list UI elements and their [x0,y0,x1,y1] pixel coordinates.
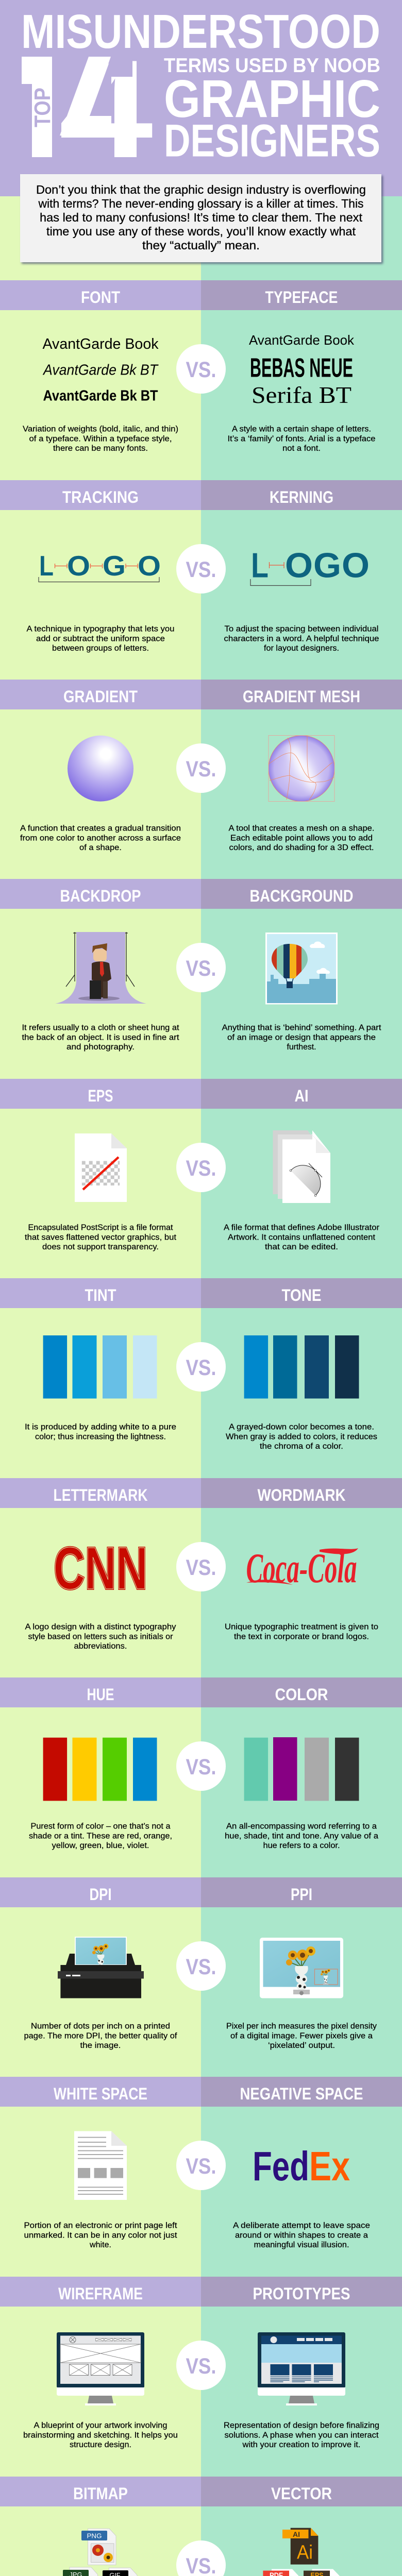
title block [22,14,379,157]
heading band: TRACKING [62,488,139,506]
descriptions: the text in corporate or brand logos. [234,1632,369,1641]
icon: prototype monitor [258,2332,345,2405]
intro text: Don’t you think that the graphic design industry is overflowing [36,183,366,196]
subtitle: terms used by noob: TERMS USED BY NOOB [164,55,380,77]
heading band: BITMAP [73,2484,128,2503]
heading band: TYPEFACE [265,288,338,307]
descriptions: structure design. [70,2441,131,2449]
descriptions: the chroma of a color. [260,1442,343,1451]
numeral 14 with top label: 1 [1,31,79,187]
intro text [36,183,366,252]
vs badge [176,1741,226,1791]
vs badge [176,2341,226,2390]
heading band: GRADIENT MESH [243,687,360,706]
intro text: time you use any of these words, you’ll know exactly what [46,225,356,238]
icon: printer with photo [58,1937,144,1998]
heading band: WORDMARK [258,1486,345,1504]
icon: ai document stack with bezier curve [273,1130,330,1203]
intro panel [20,174,381,262]
icon: eps file [304,2569,340,2576]
descriptions: of a shape. [79,843,122,852]
descriptions [20,824,374,852]
descriptions: A blueprint of your artwork involving [34,2421,167,2430]
vs badge [176,1342,226,1392]
descriptions: solutions. A phase when you can interact [225,2431,379,2439]
descriptions: Artwork. It contains unflattened content [228,1233,376,1242]
typeface samples: AvantGarde Book [249,332,355,348]
vs badge [176,1542,226,1591]
descriptions [27,624,379,653]
title: graphic: GRAPHIC [164,69,380,128]
descriptions [25,1423,377,1451]
heading band: WIREFRAME [58,2284,143,2303]
vs badge [176,743,226,793]
vs badge [176,544,226,594]
heading band [0,879,402,909]
numeral 14 with top label [22,57,153,157]
heading band [0,1677,402,1707]
descriptions [24,2222,370,2249]
descriptions: Each editable point allows you to add [230,834,373,842]
vs badge: VS. [186,358,216,382]
descriptions: A tool that creates a mesh on a shape. [229,824,374,833]
descriptions: between groups of letters. [52,644,149,653]
typeface samples: Serifa BT [252,382,351,408]
heading band: TONE [281,1286,322,1304]
icons: bitmap file types [63,2529,137,2576]
descriptions [24,2022,377,2050]
descriptions: A function that creates a gradual transition [20,824,181,833]
heading band: VECTOR [271,2484,332,2503]
panel: font vs typeface [0,280,402,453]
heading band: EPS [88,1087,113,1105]
descriptions: Purest form of color – one that’s not a [31,1822,171,1831]
descriptions [23,425,375,453]
tracking logo: L [39,550,54,582]
hue swatches [43,1738,157,1801]
vs badge [176,2141,226,2190]
descriptions: When gray is added to colors, it reduces [226,1432,377,1441]
descriptions: brainstorming and sketching. It helps you [23,2431,178,2439]
descriptions: abbreviations. [74,1642,127,1651]
icon: ai file: AI [293,2530,300,2538]
descriptions: shade or a tint. These are red, orange, [29,1832,172,1840]
icon: monitor with photo [260,1938,343,1998]
descriptions: color; thus increasing the lightness. [35,1432,166,1441]
heading band: GRADIENT [63,687,138,706]
descriptions: characters in a word. A helpful technique [224,634,379,643]
icon: pdf file [263,2569,299,2576]
icons: vector file types [263,2528,340,2576]
heading band: PROTOTYPES [253,2284,350,2303]
typeface samples [249,332,355,408]
heading band [0,1278,402,1308]
panel: dpi vs ppi [0,1877,402,2050]
heading band: FONT [81,288,120,307]
descriptions: It’s a ‘family’ of fonts. Arial is a typeface [228,434,375,443]
descriptions: ‘pixelated’ output. [268,2041,335,2050]
heading band [0,1877,402,1907]
numeral 14 with top label: 4 [59,31,154,187]
cnn logo: CNN [54,1535,147,1602]
descriptions: of a digital image. Fewer pixels give a [230,2031,373,2040]
icon: ai file [282,2528,318,2565]
descriptions: that saves flattened vector graphics, but [25,1233,177,1242]
descriptions [23,2421,379,2449]
descriptions: A file format that defines Adobe Illustrator [224,1223,379,1232]
intro text: they “actually” mean. [142,239,260,252]
gradient sphere [68,736,133,802]
vs badge [176,1143,226,1192]
color swatches [244,1737,359,1801]
heading band [0,2477,402,2506]
icon: eps document with transparency crossed out [75,1133,127,1202]
vs badge [176,1941,226,1991]
icon: jpg file [63,2567,98,2576]
font samples: AvantGarde Book [42,336,159,352]
descriptions: To adjust the spacing between individual [225,624,378,634]
kerning logo: O [342,546,370,585]
descriptions: page. The more DPI, the better quality of [24,2031,177,2040]
descriptions: colors, and do shading for a 3D effect. [229,843,374,852]
heading band: AI [295,1087,308,1105]
heading band: NEGATIVE SPACE [240,2084,363,2103]
icon: framed balloon background [266,934,337,1004]
tracking logo: O [67,550,90,582]
icon: gif file [103,2568,137,2576]
descriptions: with your creation to improve it. [242,2441,361,2449]
panel: gradient vs gradient mesh [0,680,402,852]
heading band: LETTERMARK [54,1486,147,1504]
kerning logo [250,546,370,585]
descriptions: from one color to another across a surface [20,834,181,842]
heading band [0,1478,402,1508]
descriptions: Unique typographic treatment is given to [225,1623,378,1631]
descriptions: It is produced by adding white to a pure [25,1423,176,1431]
heading band: COLOR [275,1685,328,1704]
fedex logo: Ex [309,2143,350,2189]
descriptions: Variation of weights (bold, italic, and thin) [23,425,178,434]
icon: png file [81,2529,116,2565]
vs badge: VS. [186,2354,216,2379]
kerning logo: L [251,546,269,585]
heading band [0,2277,402,2307]
heading band [0,280,402,310]
descriptions: A deliberate attempt to leave space [233,2222,370,2230]
descriptions: white. [89,2241,111,2249]
vs badge [176,943,226,992]
descriptions: meaningful visual illusion. [254,2241,349,2249]
tracking logo: O [138,550,161,582]
font samples: AvantGarde Bk BT [42,362,159,379]
vs badge: VS. [186,557,216,582]
cnn logo: CNN [54,1535,147,1602]
heading band [0,1079,402,1109]
vs badge [176,344,226,394]
descriptions [22,1023,381,1052]
descriptions: there can be many fonts. [53,444,148,453]
descriptions [25,1223,379,1251]
descriptions: Anything that is ‘behind’ something. A part [222,1023,381,1032]
descriptions: Encapsulated PostScript is a file format [28,1223,173,1232]
heading band [0,480,402,510]
heading band: DPI [90,1885,111,1904]
heading band [0,2077,402,2107]
descriptions: A logo design with a distinct typography [25,1623,176,1631]
numeral 14 with top label: TOP [30,88,55,127]
descriptions: does not support transparency. [42,1243,159,1251]
gradient mesh sphere [269,736,334,802]
icon: page layout with white space [74,2131,127,2200]
descriptions: of a typeface. Within a typeface style, [29,434,172,443]
panel: bitmap vs vector [0,2477,402,2576]
icon: png file: PNG [87,2532,102,2540]
descriptions: Portion of an electronic or print page left [24,2222,177,2230]
descriptions [29,1822,378,1850]
descriptions: furthest. [287,1043,316,1052]
heading band [0,680,402,709]
intro text: has led to many confusions! It’s time to clear them. The next [40,211,363,224]
descriptions: around or within shapes to create a [235,2231,368,2240]
heading band: KERNING [270,488,333,506]
icon: photo backdrop with businessman [55,932,146,1004]
descriptions: A style with a certain shape of letters. [232,425,371,434]
icon: wireframe monitor [57,2332,144,2405]
heading band: TINT [85,1286,116,1304]
descriptions: An all-encompassing word referring to a [226,1822,377,1831]
descriptions: for layout designers. [264,644,339,653]
icon: ai file: Ai [297,2542,313,2564]
heading band: BACKGROUND [249,887,354,905]
panel: backdrop vs background [0,879,402,1052]
intro text: with terms? The never-ending glossary is a killer at times. This [38,197,363,210]
heading band: PPI [291,1885,312,1904]
panel: tracking vs kerning [0,480,402,653]
descriptions: hue refers to a color. [263,1841,340,1850]
vs badge [176,2540,226,2576]
descriptions: hue, shade, tint and tone. Any value of a [225,1832,378,1840]
descriptions: A grayed-down color becomes a tone. [229,1423,374,1431]
descriptions: the back of an object. It is used in fine art [22,1033,179,1042]
descriptions: Number of dots per inch on a printed [31,2022,170,2031]
descriptions: Pixel per inch measures the pixel density [226,2022,377,2031]
heading band: BACKDROP [60,887,141,905]
vs badge: VS. [186,2154,216,2179]
vs badge: VS. [186,1755,216,1780]
tracking logo: G [103,550,126,582]
descriptions: not a font. [282,444,321,453]
heading band: WHITE SPACE [54,2084,147,2103]
vs badge: VS. [186,1955,216,1979]
descriptions: Representation of design before finalizing [224,2421,379,2430]
font samples [42,336,159,404]
vs badge: VS. [186,757,216,782]
panel: lettermark vs wordmark [0,1478,402,1651]
heading band: HUE [87,1685,114,1704]
panel: hue vs color [0,1677,402,1850]
kerning logo: G [313,546,341,585]
vs badge: VS. [186,1355,216,1380]
panel: white space vs negative space [0,2077,402,2249]
font samples: AvantGarde Bk BT [43,388,158,404]
kerning logo: O [285,546,313,585]
panel: tint vs tone [0,1278,402,1451]
tracking logo [39,550,161,582]
vs badge: VS. [186,1555,216,1580]
descriptions: of an image or design that appears the [227,1033,376,1042]
descriptions: yellow, green, blue, violet. [52,1841,149,1850]
descriptions: add or subtract the uniform space [36,634,165,643]
descriptions: unmarked. It can be in any color not just [24,2231,177,2240]
descriptions: the image. [80,2041,121,2050]
tint swatches [43,1335,157,1398]
panel: wireframe vs prototypes [0,2277,402,2449]
descriptions [25,1623,378,1651]
descriptions: and photography. [66,1043,135,1052]
vs badge: VS. [186,1156,216,1181]
descriptions: A technique in typography that lets you [27,624,174,634]
panel: eps vs ai [0,1079,402,1251]
descriptions: It refers usually to a cloth or sheet hung at [22,1023,179,1032]
descriptions: style based on letters such as initials or [28,1632,173,1641]
vs badge: VS. [186,956,216,981]
fedex logo: Fed [253,2143,309,2189]
descriptions: that can be edited. [265,1243,338,1251]
tone swatches [244,1335,359,1398]
